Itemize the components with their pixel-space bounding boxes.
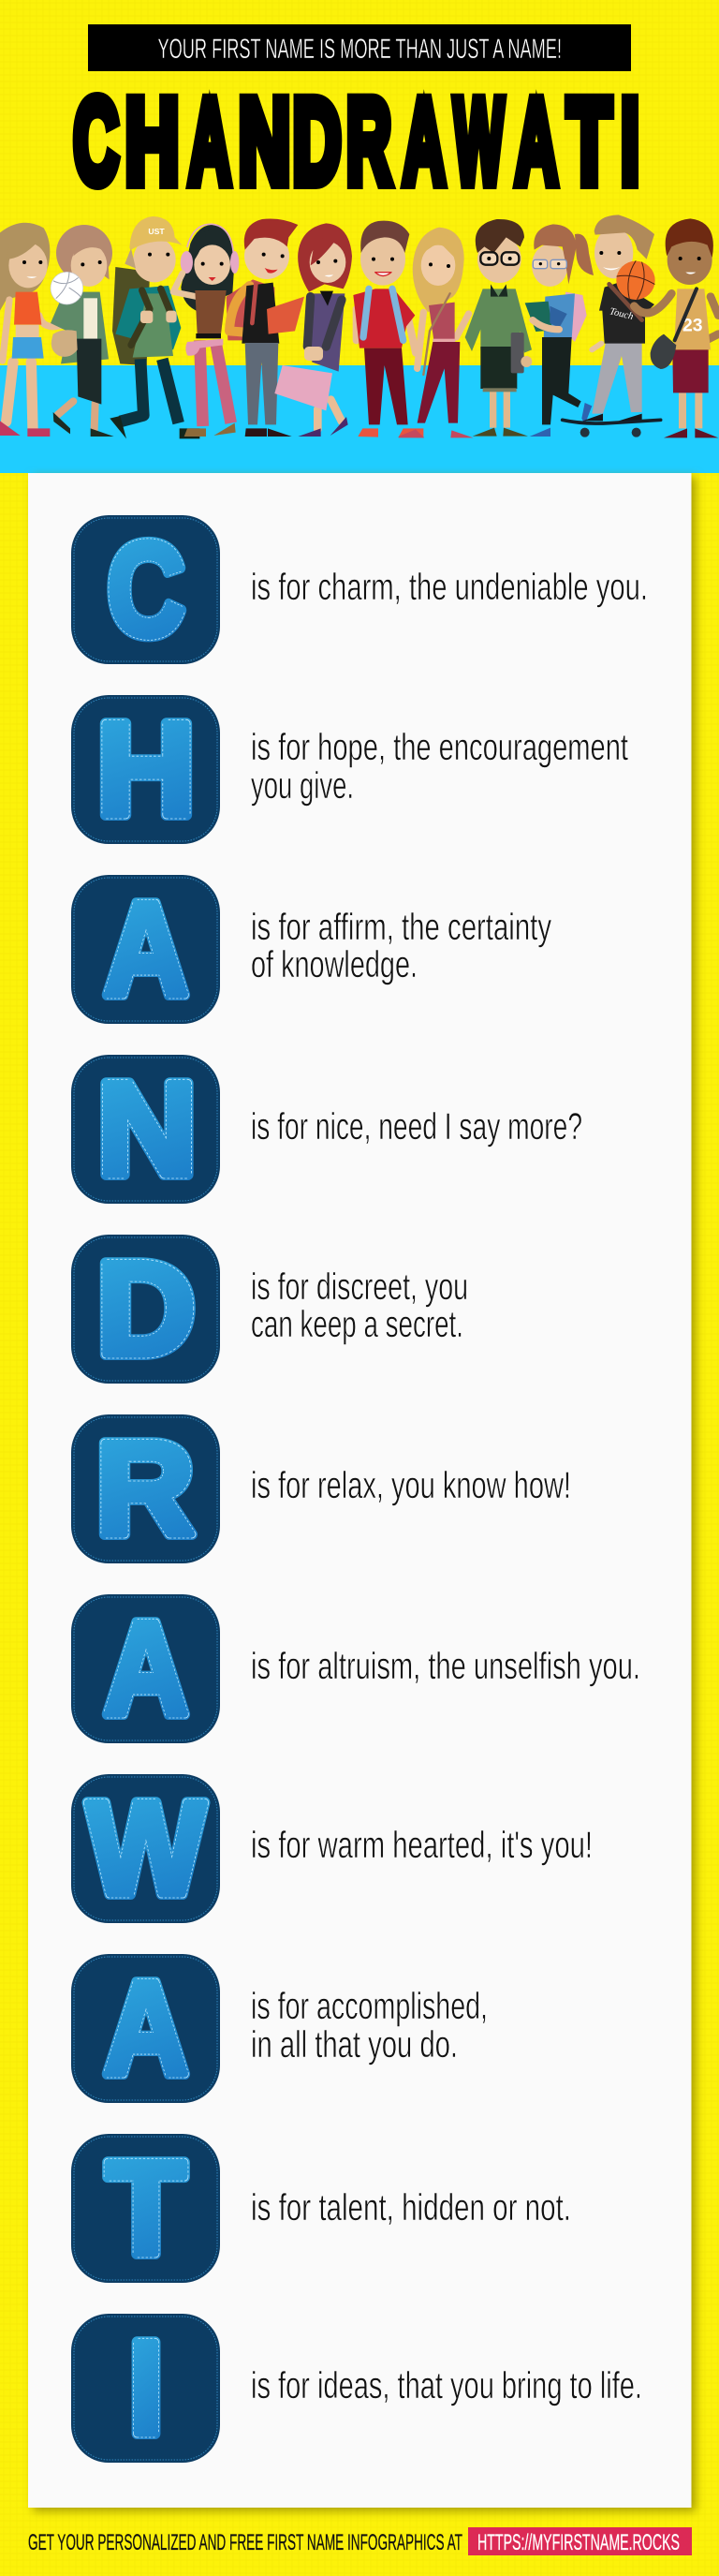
icon: letter R: R <box>95 1414 195 1563</box>
icon: letter C: C <box>107 516 185 664</box>
person: backpacker in yellow cap <box>110 216 199 438</box>
icon: letter W: W <box>87 1774 205 1923</box>
text: A <box>251 907 551 985</box>
icon: letter R: R <box>95 1414 195 1563</box>
icon: letter D: D <box>96 1235 196 1384</box>
text: T: is for talent, hidden or not. <box>251 2187 571 2228</box>
icon: letter C: C <box>107 516 185 664</box>
icon: letter I: I <box>128 2315 164 2463</box>
title: H <box>125 74 179 209</box>
icon: letter I: I <box>128 2315 164 2463</box>
title: N <box>239 75 290 209</box>
row: A <box>71 1954 488 2103</box>
text: R: is for relax, you know how! <box>251 1465 571 1506</box>
floor band <box>0 365 719 473</box>
icon: letter H: H <box>96 695 196 844</box>
row: D <box>71 1235 468 1384</box>
title <box>73 73 639 209</box>
icon: letter N: N <box>97 1055 197 1203</box>
icon: letter D <box>71 1235 220 1384</box>
icon: letter D: D <box>96 1235 196 1384</box>
person: skater with basketball <box>563 215 661 437</box>
icon: letter A <box>71 1594 220 1743</box>
person: girl with ponytail and tablet <box>525 224 594 437</box>
icon: letter N <box>71 1055 220 1204</box>
icon: letter C: C <box>107 516 185 664</box>
row: R <box>71 1414 571 1563</box>
title: A <box>515 76 558 209</box>
panel: letter list <box>28 473 691 2508</box>
header banner <box>88 24 631 71</box>
title: I <box>621 74 639 208</box>
icon: letter T: T <box>106 2134 186 2282</box>
icon: letter N: N <box>97 1055 197 1203</box>
person: skater with basketball: Touch <box>609 306 635 322</box>
person: boy in yellow tank top <box>634 218 718 437</box>
icon: letter A: A <box>104 1595 188 1743</box>
text: N: is for nice, need I say more? <box>251 1106 582 1147</box>
icon: letter C <box>71 515 220 664</box>
icon: letter A: A <box>104 1595 188 1743</box>
illustration: group of students left <box>0 216 352 438</box>
text: D: can keep a secret. <box>251 1304 463 1345</box>
icon: letter R: R <box>95 1414 195 1563</box>
text: A: is for affirm, the certainty <box>251 907 551 948</box>
person: boy with book <box>227 218 304 437</box>
row: A <box>71 875 551 1024</box>
icon: letter R <box>71 1414 220 1563</box>
icon: letter T <box>71 2134 220 2283</box>
person: backpacker in yellow cap: UST <box>148 227 165 236</box>
person: boy with glasses and shorts <box>465 219 532 437</box>
title: A <box>188 76 231 209</box>
person: girl with volleyball <box>51 225 114 437</box>
title: C <box>73 75 119 209</box>
text: A: of knowledge. <box>251 944 418 985</box>
icon: letter A: A <box>104 876 188 1024</box>
row: H <box>71 695 628 844</box>
icon: letter I <box>71 2314 220 2463</box>
text: H: you give. <box>251 765 354 807</box>
person: girl with headphones <box>173 224 239 437</box>
text: A: is for accomplished, <box>251 1986 488 2027</box>
person: boy in yellow tank top: 23 <box>682 316 703 335</box>
text: A <box>251 1986 488 2065</box>
icon: letter D: D <box>96 1235 196 1384</box>
icon: letter N: N <box>97 1055 197 1203</box>
person: blonde girl <box>399 228 474 437</box>
person: boy in red t-shirt <box>353 221 423 437</box>
row: W <box>71 1774 593 1923</box>
row: I <box>71 2314 642 2463</box>
title: T <box>567 75 611 209</box>
icon: letter T: T <box>106 2134 186 2282</box>
row: N <box>71 1055 582 1204</box>
icon: letter A: A <box>104 876 188 1024</box>
icon: letter A: A <box>104 876 188 1024</box>
icon: letter H <box>71 695 220 844</box>
title: R <box>346 75 391 209</box>
row: A <box>71 1594 640 1743</box>
row: T <box>71 2134 571 2283</box>
icon: letter A: A <box>104 1955 188 2103</box>
icon: letter H: H <box>96 695 196 844</box>
text: D: is for discreet, you <box>251 1266 468 1308</box>
icon: letter A <box>71 875 220 1024</box>
icon: letter A: A <box>104 1595 188 1743</box>
row: C <box>71 515 648 664</box>
icon: letter A: A <box>104 1955 188 2103</box>
icon: letter H: H <box>96 695 196 844</box>
text: W: is for warm hearted, it's you! <box>251 1825 593 1866</box>
icon: letter I: I <box>128 2315 164 2463</box>
title: D <box>293 74 341 208</box>
icon: letter W: W <box>87 1774 205 1923</box>
text: D <box>251 1266 468 1345</box>
text: A: in all that you do. <box>251 2024 458 2065</box>
person: red-haired girl with pink bag <box>274 223 352 437</box>
person: girl in orange top <box>0 223 72 437</box>
icon: letter W: W <box>87 1774 205 1923</box>
icon: letter T: T <box>106 2134 186 2282</box>
icon: letter A: A <box>104 1955 188 2103</box>
title: A <box>403 76 446 209</box>
illustration: group of students right <box>353 215 718 437</box>
text: H <box>251 727 628 807</box>
icon: letter A <box>71 1954 220 2103</box>
title: W <box>454 73 504 208</box>
